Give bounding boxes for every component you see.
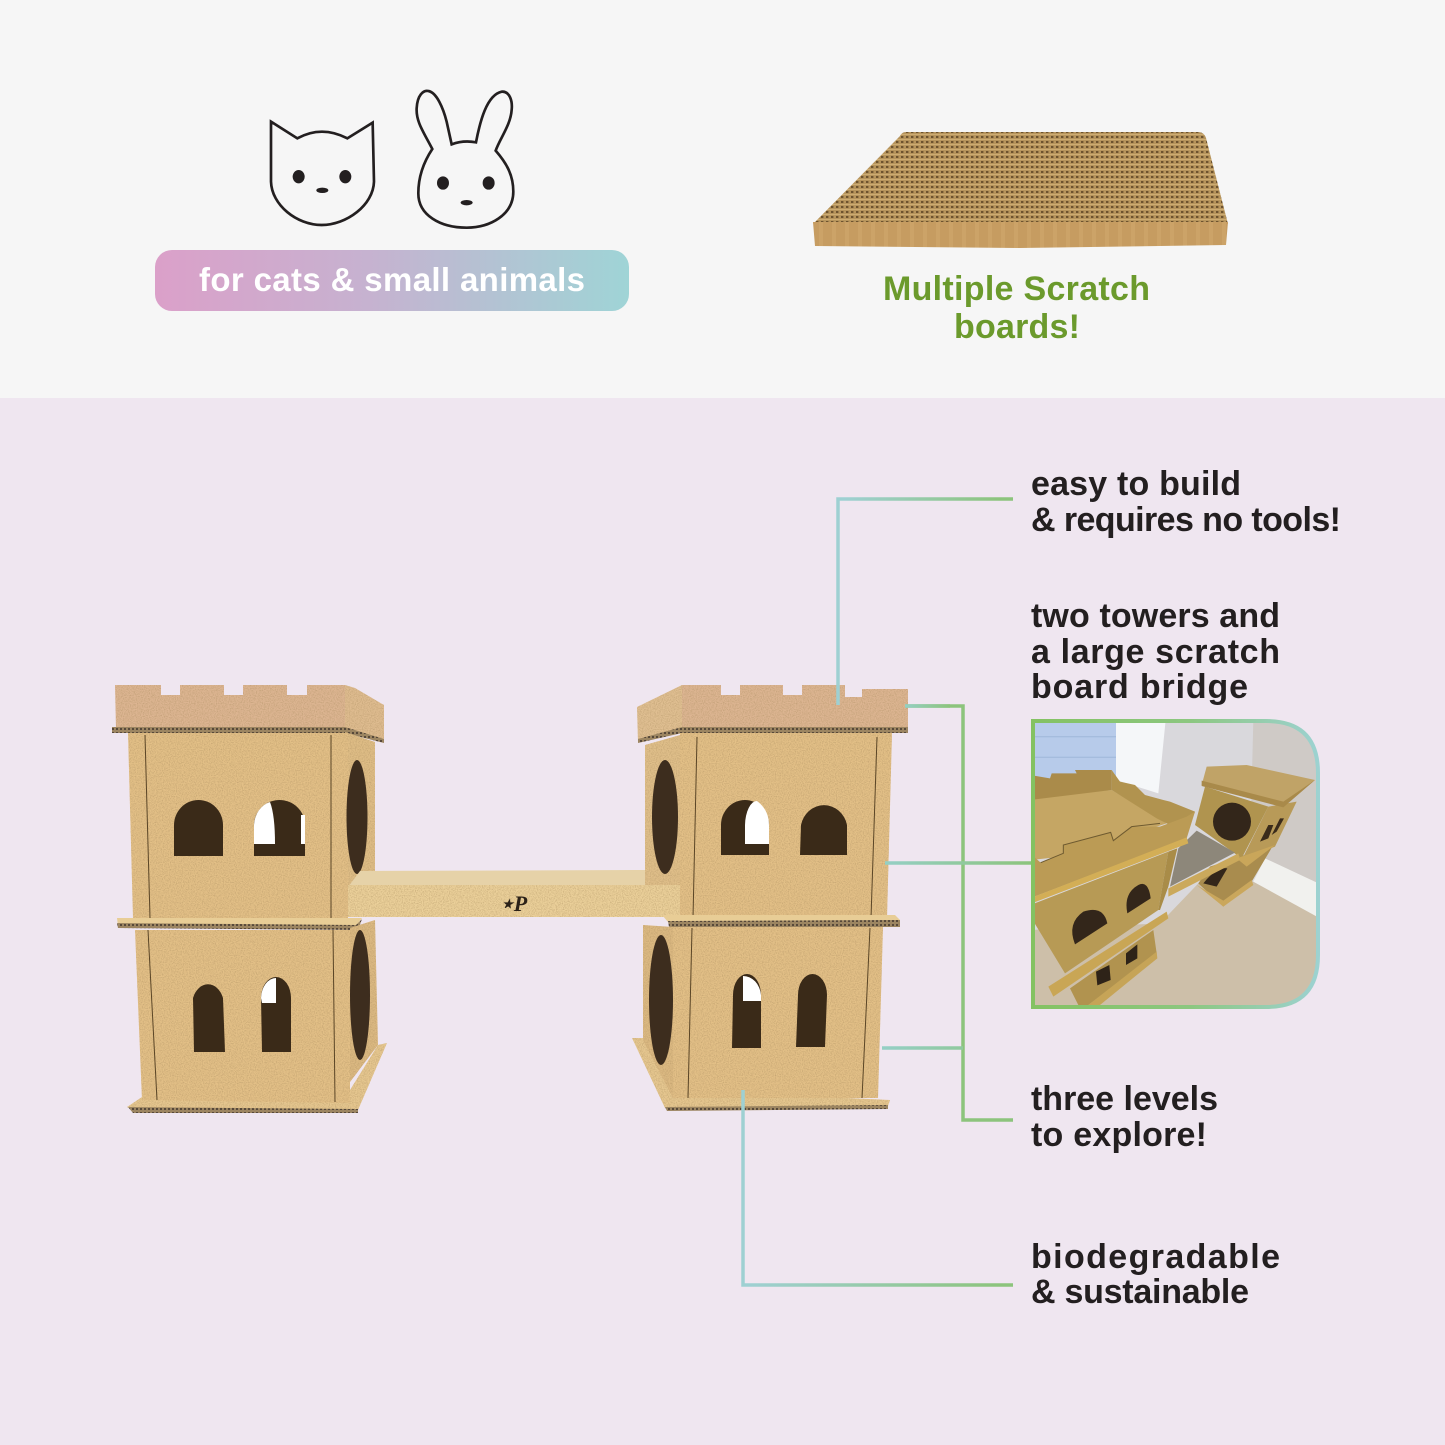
photo bridge (1170, 831, 1235, 887)
text: two towers: two towers and (1031, 597, 1280, 635)
callout lines: easy to build (838, 499, 1013, 705)
right tower base (632, 1038, 890, 1108)
right tower middle slab (662, 915, 900, 927)
text: three levels (1031, 1080, 1218, 1154)
panel: lower background (0, 398, 1445, 1445)
text: two towers: board bridge (1031, 668, 1248, 706)
text: two towers: a large scratch (1031, 633, 1280, 671)
right tower parapet (637, 685, 908, 743)
badge: for cats and small animals: for cats & small animals (199, 261, 585, 298)
photo small tower (1195, 765, 1315, 907)
right tower base edge (665, 1105, 888, 1111)
text: biodegradable: & sustainable (1031, 1273, 1249, 1311)
left tower upper floor (128, 732, 375, 918)
text: three levels: three levels (1031, 1080, 1218, 1118)
text: easy to build: easy to build (1031, 465, 1241, 503)
left tower parapet (112, 685, 384, 743)
text: biodegradable (1031, 1238, 1280, 1311)
panel: top background (0, 0, 1445, 398)
castle: right tower (632, 685, 908, 1111)
icon: cat face (271, 122, 374, 225)
castle: scratch board bridge (348, 870, 681, 917)
photo frame (1033, 721, 1318, 1007)
left tower base edge (128, 1107, 358, 1113)
castle: left tower (112, 685, 387, 1113)
heading: multiple scratch boards: boards! (954, 308, 1080, 346)
bridge logo: ⋆P (500, 891, 528, 916)
heading: multiple scratch boards: Multiple Scratch (883, 270, 1150, 308)
badge: for cats and small animals (155, 250, 629, 311)
text: biodegradable: biodegradable (1031, 1238, 1280, 1276)
left tower lower floor (135, 920, 378, 1103)
left tower base (127, 1043, 387, 1110)
text: easy to build: & requires no tools! (1031, 501, 1341, 539)
text: easy to build (1031, 465, 1341, 539)
text: two towers (1031, 597, 1280, 706)
callout lines: biodegradable (743, 1090, 1013, 1285)
callout lines: three levels bracket (882, 706, 1031, 1120)
text: three levels: to explore! (1031, 1116, 1207, 1154)
photo big tower (1030, 770, 1195, 1005)
left tower middle slab (117, 918, 362, 930)
photo: castle in room (1030, 720, 1323, 1010)
icon: rabbit face (417, 91, 513, 228)
right tower lower floor (643, 925, 883, 1098)
scratch board illustration (813, 132, 1228, 248)
heading: multiple scratch boards (883, 270, 1150, 346)
right tower upper floor (645, 733, 892, 918)
